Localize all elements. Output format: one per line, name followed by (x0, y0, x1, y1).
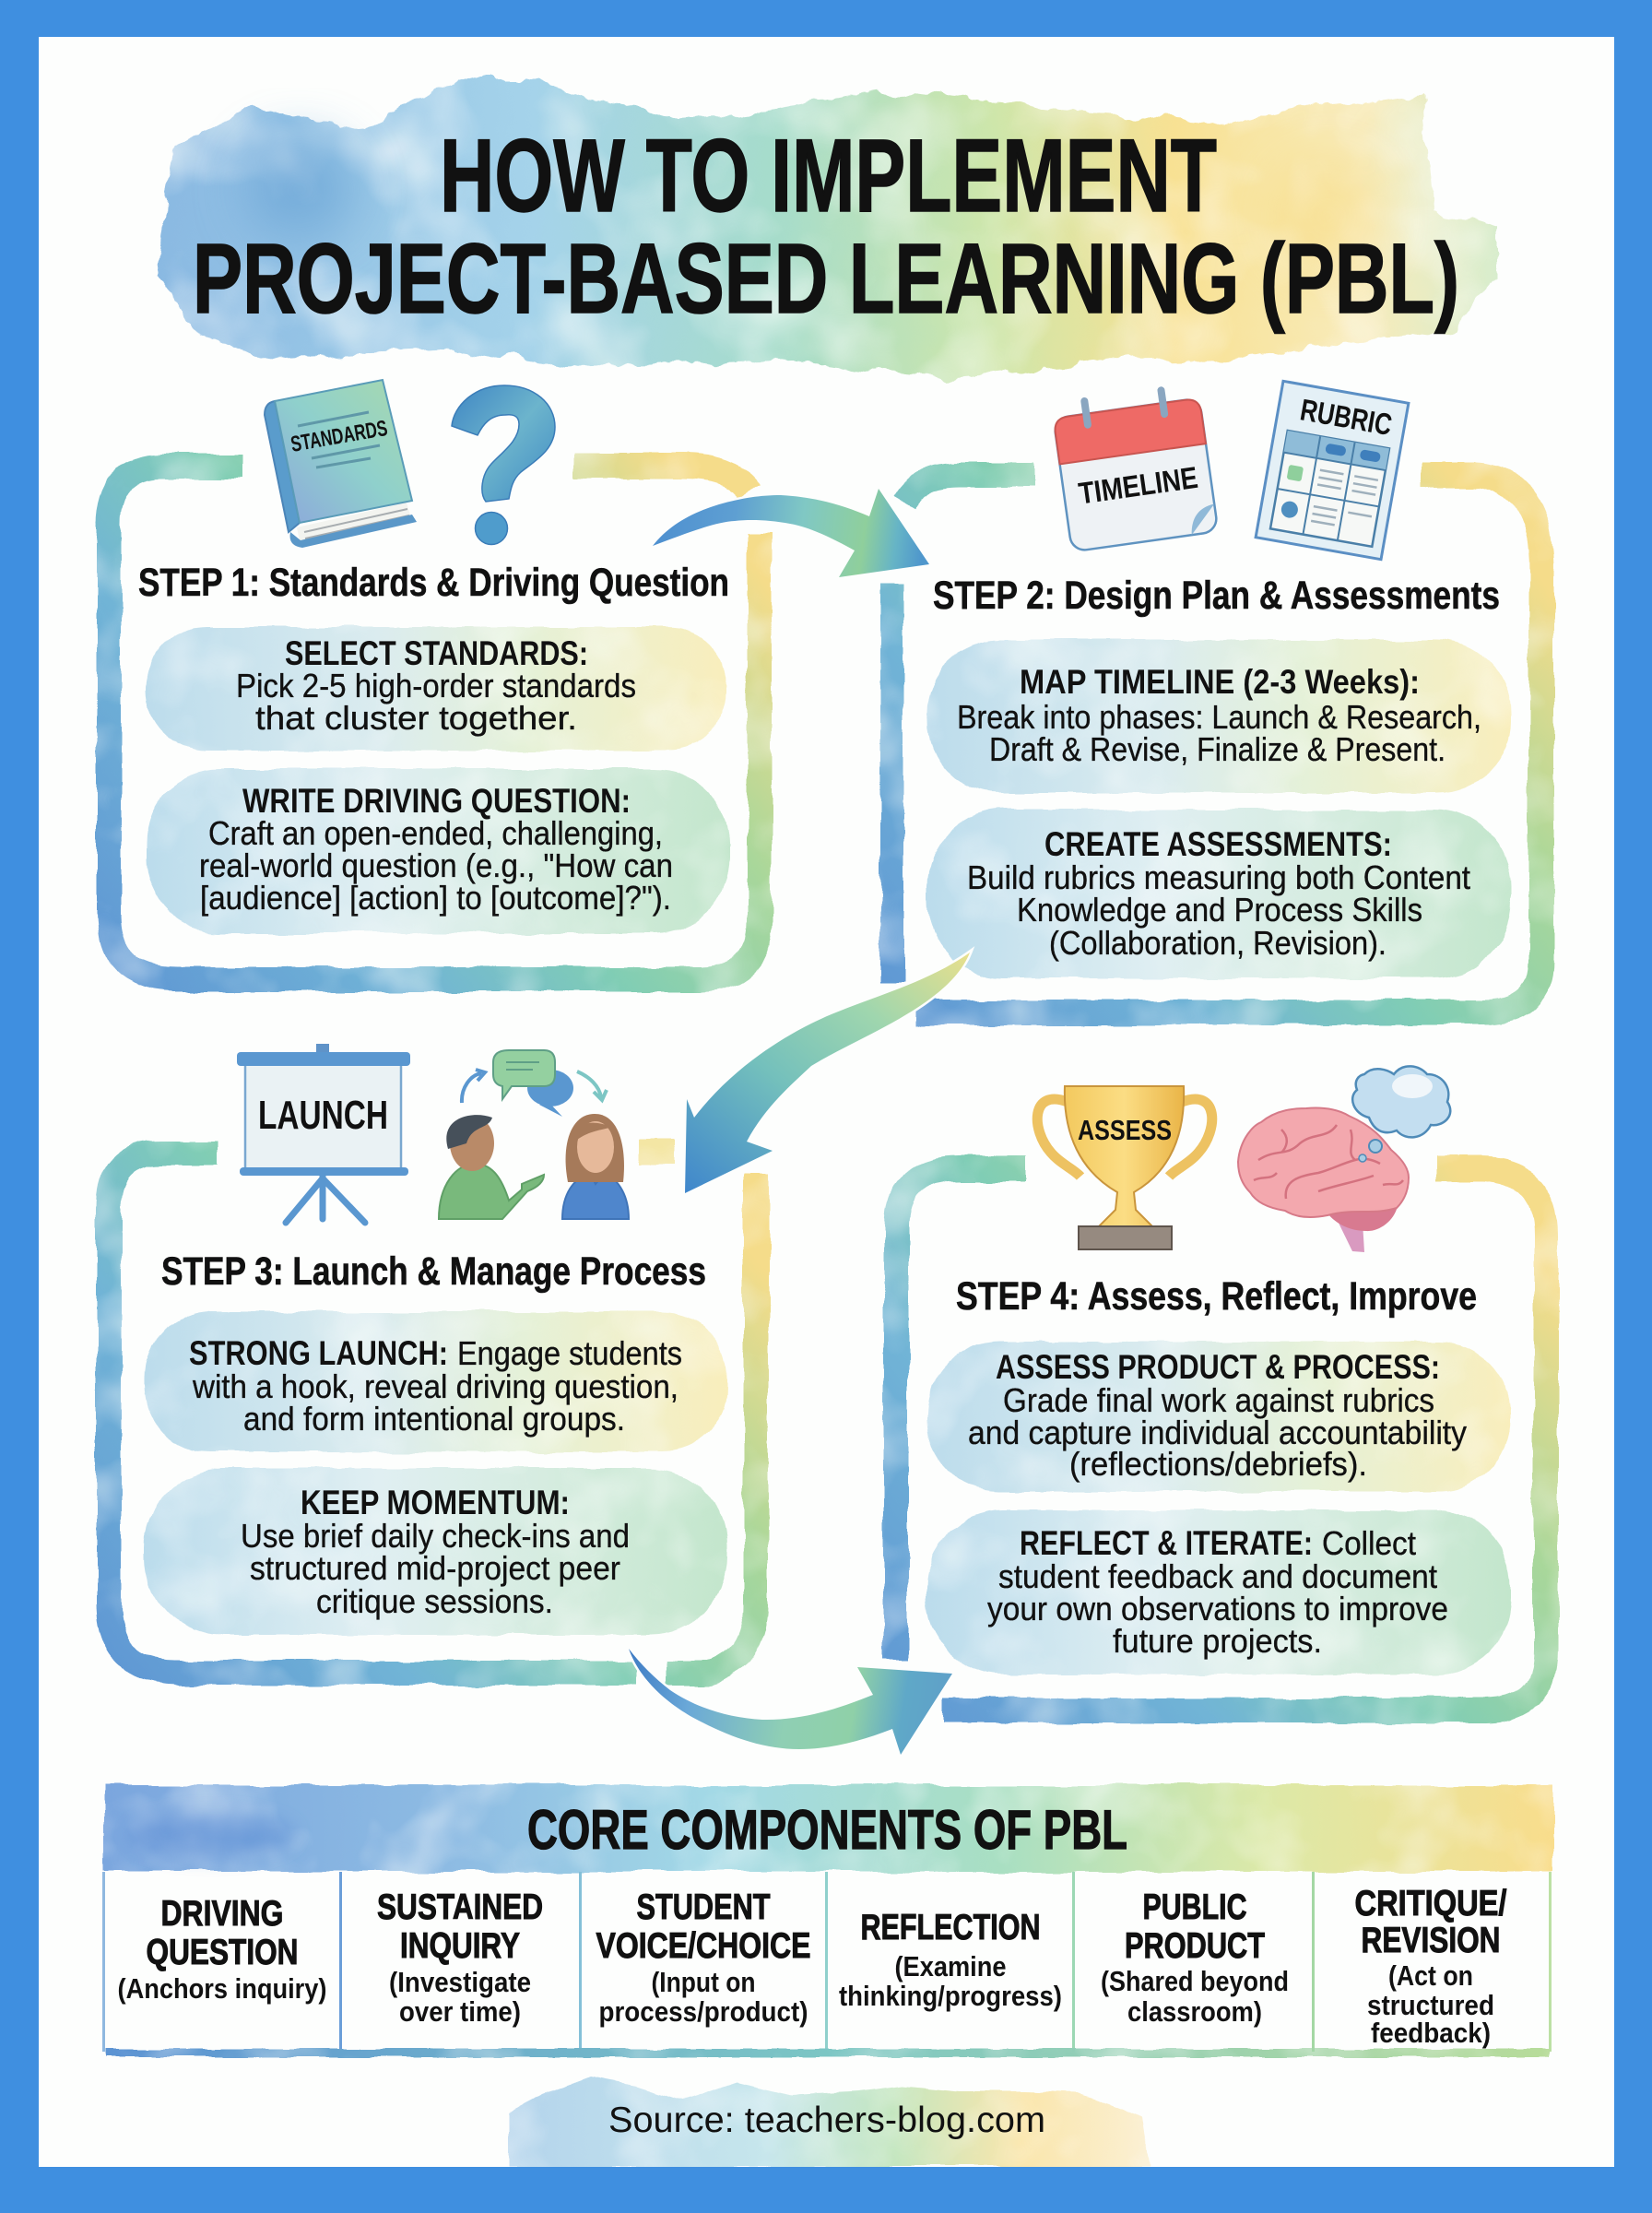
card: strong launch: and form intentional groups. (243, 1400, 625, 1438)
card: keep momentum: Use brief daily check-ins and (241, 1517, 630, 1555)
component: driving question: QUESTION (146, 1933, 299, 1972)
component: critique and revision: feedback) (1371, 2017, 1491, 2049)
card: write driving question: Craft an open-ended, challenging, (208, 814, 663, 852)
card: strong launch (145, 1312, 727, 1452)
card: strong launch: Engage students (457, 1334, 682, 1372)
table grid (102, 1872, 1552, 2057)
core header band (103, 1785, 1553, 1872)
component: public product: classroom) (1127, 1995, 1262, 2028)
icon: timeline calendar: TIMELINE (1077, 460, 1200, 511)
component: sustained inquiry (377, 1888, 543, 2028)
card: create assessments: Knowledge and Process Skills (1017, 891, 1422, 929)
card: reflect and iterate: your own observations to improve (987, 1590, 1448, 1627)
step 2 heading: STEP 2: Design Plan & Assessments (933, 574, 1500, 618)
component: driving question (118, 1894, 326, 2005)
icon: question mark (452, 385, 555, 544)
icon: standards book: STANDARDS (289, 416, 389, 457)
component: driving question: (Anchors inquiry) (118, 1972, 326, 2005)
card: reflect and iterate: student feedback and document (998, 1557, 1437, 1595)
title text (193, 118, 1459, 334)
icon: brain with thought cloud (1238, 1066, 1450, 1252)
icon: assess trophy (1037, 1086, 1212, 1249)
card: keep momentum: critique sessions. (316, 1582, 553, 1620)
step 1 heading: STEP 1: Standards & Driving Question (138, 561, 729, 605)
card: keep momentum: KEEP MOMENTUM: (301, 1484, 570, 1521)
panel: step 4 (896, 1066, 1546, 1710)
component: critique and revision: (Act on (1388, 1959, 1473, 1992)
component: reflection: REFLECTION (861, 1908, 1040, 1947)
card: reflect and iterate (926, 1510, 1511, 1675)
source text: Source: teachers-blog.com (608, 2101, 1045, 2140)
card: assess product and process: and capture individual accountability (968, 1414, 1467, 1451)
step 3 heading: STEP 3: Launch & Manage Process (161, 1249, 706, 1294)
lower frame strip (0, 2167, 1652, 2213)
card: map timeline: Break into phases: Launch & Research, (957, 698, 1481, 736)
watercolor wash behind title (158, 78, 1496, 379)
card: select standards: that cluster together. (255, 699, 577, 737)
title text: HOW TO IMPLEMENT (440, 118, 1217, 233)
panel: step 1 (109, 380, 760, 979)
component: reflection: (Examine (894, 1950, 1007, 1982)
component: student voice and choice: (Input on (651, 1966, 756, 1998)
component: student voice and choice: VOICE/CHOICE (596, 1926, 811, 1966)
panel: step 3 (109, 1044, 756, 1673)
card: assess product and process (926, 1342, 1511, 1491)
step 4 heading: STEP 4: Assess, Reflect, Improve (956, 1274, 1477, 1319)
component: student voice and choice: STUDENT (636, 1888, 771, 1927)
card: select standards: Pick 2-5 high-order standards (236, 667, 636, 704)
card: assess product and process: Grade final work against rubrics (1003, 1381, 1434, 1419)
component: student voice and choice: process/product) (599, 1995, 808, 2028)
component: sustained inquiry: INQUIRY (400, 1926, 520, 1966)
component: sustained inquiry: over time) (399, 1995, 521, 2028)
card: create assessments (926, 810, 1511, 978)
card: reflect and iterate: REFLECT & ITERATE: (1020, 1524, 1313, 1562)
icon: assess trophy: ASSESS (1078, 1114, 1172, 1146)
icon: rubric sheet: RUBRIC (1298, 392, 1395, 442)
card: assess product and process: (reflections/debriefs). (1069, 1445, 1367, 1483)
component: sustained inquiry: SUSTAINED (377, 1888, 543, 1927)
card: strong launch: STRONG LAUNCH: (189, 1334, 448, 1372)
component: public product: PRODUCT (1125, 1926, 1265, 1966)
component: reflection (839, 1908, 1062, 2012)
arrow: step 2 to step 3 (685, 953, 970, 1193)
card: write driving question: [audience] [action] to [outcome]?"). (200, 879, 671, 917)
step 2 frame (880, 475, 1541, 1012)
card: assess product and process: ASSESS PRODUCT & PROCESS: (996, 1348, 1440, 1386)
card: reflect and iterate: future projects. (1113, 1622, 1322, 1660)
icon: standards book (265, 380, 417, 548)
card: map timeline: Draft & Revise, Finalize & Present. (989, 730, 1446, 768)
component: critique and revision (1355, 1884, 1507, 2049)
panel: core components of PBL (102, 1785, 1553, 2057)
card: map timeline: MAP TIMELINE (2-3 Weeks): (1020, 663, 1420, 701)
panel: step 2 (880, 381, 1541, 1012)
card: write driving question (146, 769, 728, 933)
component: critique and revision: REVISION (1361, 1921, 1501, 1960)
icon: launch projector screen (237, 1044, 410, 1223)
step 4 frame (896, 1169, 1546, 1710)
card: create assessments: (Collaboration, Revision). (1049, 924, 1386, 962)
component: public product (1101, 1888, 1289, 2028)
card: create assessments: Build rubrics measuring both Content (967, 858, 1470, 896)
card: keep momentum: structured mid-project peer (250, 1549, 620, 1587)
icon: launch projector screen: LAUNCH (258, 1093, 388, 1138)
icon: people discussing (439, 1050, 629, 1219)
source wash (509, 2077, 1150, 2167)
title banner (158, 78, 1496, 379)
component: driving question: DRIVING (160, 1894, 284, 1934)
card: select standards: SELECT STANDARDS: (285, 634, 588, 672)
component: public product: PUBLIC (1143, 1888, 1246, 1927)
card: reflect and iterate: Collect (1322, 1524, 1416, 1562)
arrow: step 3 to step 4 (629, 1649, 952, 1755)
component: critique and revision: CRITIQUE/ (1355, 1884, 1507, 1923)
card: write driving question: real-world question (e.g., "How can (199, 846, 673, 884)
step 1 frame (109, 466, 760, 979)
component: public product: (Shared beyond (1101, 1965, 1289, 1997)
step 3 frame (109, 1140, 756, 1673)
icon: timeline calendar (1051, 382, 1218, 551)
component: reflection: thinking/progress) (839, 1980, 1062, 2012)
card: keep momentum (145, 1468, 727, 1635)
icon: rubric sheet (1256, 381, 1409, 560)
core heading: CORE COMPONENTS OF PBL (527, 1799, 1127, 1861)
component: student voice and choice (596, 1888, 811, 2028)
component: sustained inquiry: (Investigate (389, 1966, 531, 1998)
arrow: step 1 to step 2 (653, 489, 929, 577)
card: write driving question: WRITE DRIVING QUESTION: (242, 782, 631, 820)
card: strong launch: with a hook, reveal driving question, (192, 1367, 678, 1405)
source footer (509, 2077, 1150, 2167)
card: select standards (146, 627, 728, 751)
card: map timeline (926, 640, 1511, 793)
component: critique and revision: structured (1367, 1989, 1494, 2021)
card: create assessments: CREATE ASSESSMENTS: (1044, 825, 1392, 863)
